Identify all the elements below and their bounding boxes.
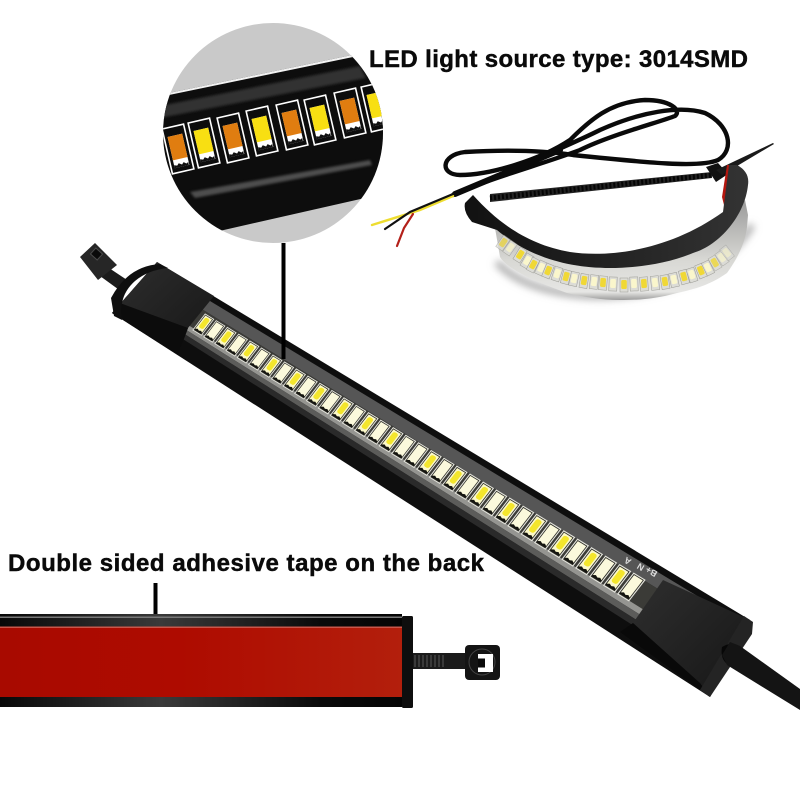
- pad markings at the end of the strip: N: [635, 561, 646, 573]
- red adhesive tape: [722, 165, 733, 217]
- top grey band: [146, 266, 747, 639]
- cable tie strap: [413, 653, 467, 669]
- LED track band: [132, 275, 740, 662]
- cable tie head: [465, 645, 500, 680]
- lower reflection band: [129, 290, 728, 668]
- bottom black rail: [0, 697, 402, 707]
- pad markings at the end of the strip: A: [622, 555, 633, 567]
- magnified black bar: [163, 55, 383, 230]
- cable tie at left end: [80, 243, 130, 292]
- pad markings at the end of the strip: [622, 555, 659, 579]
- magnified LED detail circle: [163, 23, 383, 243]
- black arc housing: [465, 165, 748, 268]
- pad markings at the end of the strip: B+: [644, 564, 659, 579]
- cable tie head and tail: [706, 143, 774, 182]
- cable tie across the arc: [490, 172, 712, 202]
- red adhesive tape: [0, 627, 402, 697]
- end cap: [402, 616, 413, 708]
- bar body: [112, 262, 750, 697]
- LEDs along the arc: [496, 235, 734, 292]
- LED chips on the bar: [193, 313, 645, 602]
- left end cap: [112, 262, 214, 355]
- soft shadow: [497, 225, 752, 296]
- top black rail: [0, 614, 402, 627]
- main diagonal LED bar: [80, 243, 800, 710]
- magnified LED chips: [162, 82, 393, 174]
- heading: LED light source type: LED light source type: 3014SMD: [369, 46, 748, 73]
- leader line to tape: [154, 583, 158, 627]
- right end cap: [633, 580, 750, 697]
- wires: [446, 100, 728, 195]
- leader line from circle to bar: [282, 243, 286, 359]
- lens background: [163, 23, 383, 243]
- caption: double sided adhesive tape: Double sided adhesive tape on the back: [8, 550, 485, 577]
- curved strip product photo: [372, 100, 774, 300]
- left end cap lip: [111, 264, 168, 320]
- cable hole: [722, 644, 739, 664]
- clear LED section: [495, 200, 748, 300]
- cable at right end: [722, 642, 800, 710]
- rear view of bar with red tape: [0, 614, 500, 708]
- stripped wire ends: [372, 194, 453, 246]
- right end cap lip: [700, 616, 753, 697]
